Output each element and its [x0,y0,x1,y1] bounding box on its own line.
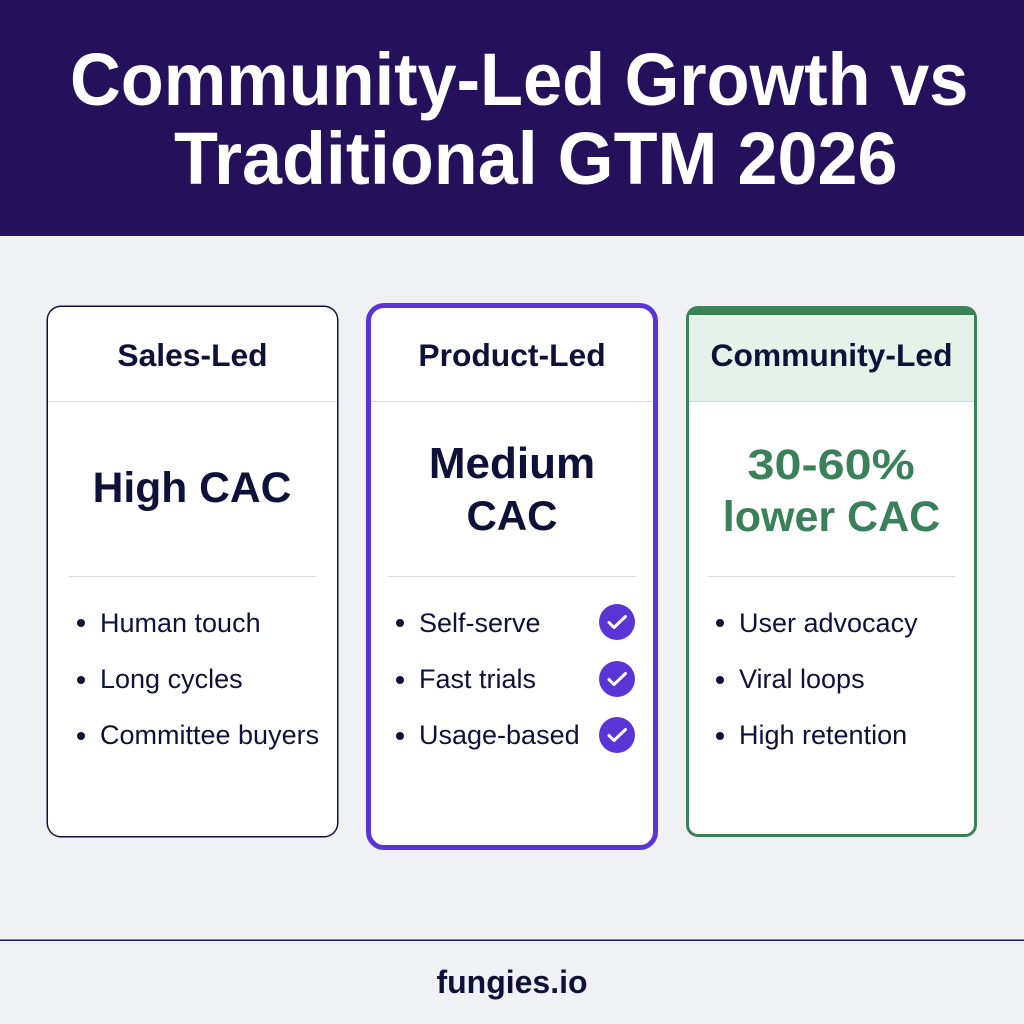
metric: lower CAC: lower CAC [723,493,940,541]
list: product-led traits: Usage-based [419,720,580,750]
heading: community-led [689,315,974,402]
metric: lower CAC [723,441,940,541]
list: community-led traits: High retention [739,720,907,750]
panel: product-led [366,303,658,850]
list: community-led traits: Viral loops [739,664,865,694]
panel: community-led [686,306,977,837]
metric: lower CAC: 30-60% [748,441,915,489]
list: sales-led traits: Human touch [100,608,261,638]
heading: community-led: Community-Led [710,337,952,373]
metric: medium CAC: Medium [429,439,595,488]
footer brand: fungies.io [436,964,588,1000]
list: product-led traits [396,604,635,753]
heading: sales-led: Sales-Led [117,337,268,373]
list: community-led traits: User advocacy [739,608,918,638]
heading: product-led: Product-Led [418,337,606,373]
list: sales-led traits: Committee buyers [100,720,319,750]
footer [0,940,1024,1024]
metric: medium CAC [429,439,595,539]
icon: check 1 [599,604,635,640]
list: community-led traits [716,608,918,750]
list: sales-led traits [77,608,319,750]
list: product-led traits: Fast trials [419,664,536,694]
header banner [0,0,1024,236]
metric: medium CAC: CAC [466,492,558,539]
list: sales-led traits: Long cycles [100,664,243,694]
metric: high CAC: High CAC [93,464,291,512]
icon: check 2 [599,661,635,697]
panel: sales-led [47,306,338,837]
title line 2: Traditional GTM 2026 [174,117,897,200]
title line 1: Community-Led Growth vs [70,38,968,121]
list: product-led traits: Self-serve [419,608,541,638]
icon: check 3 [599,717,635,753]
